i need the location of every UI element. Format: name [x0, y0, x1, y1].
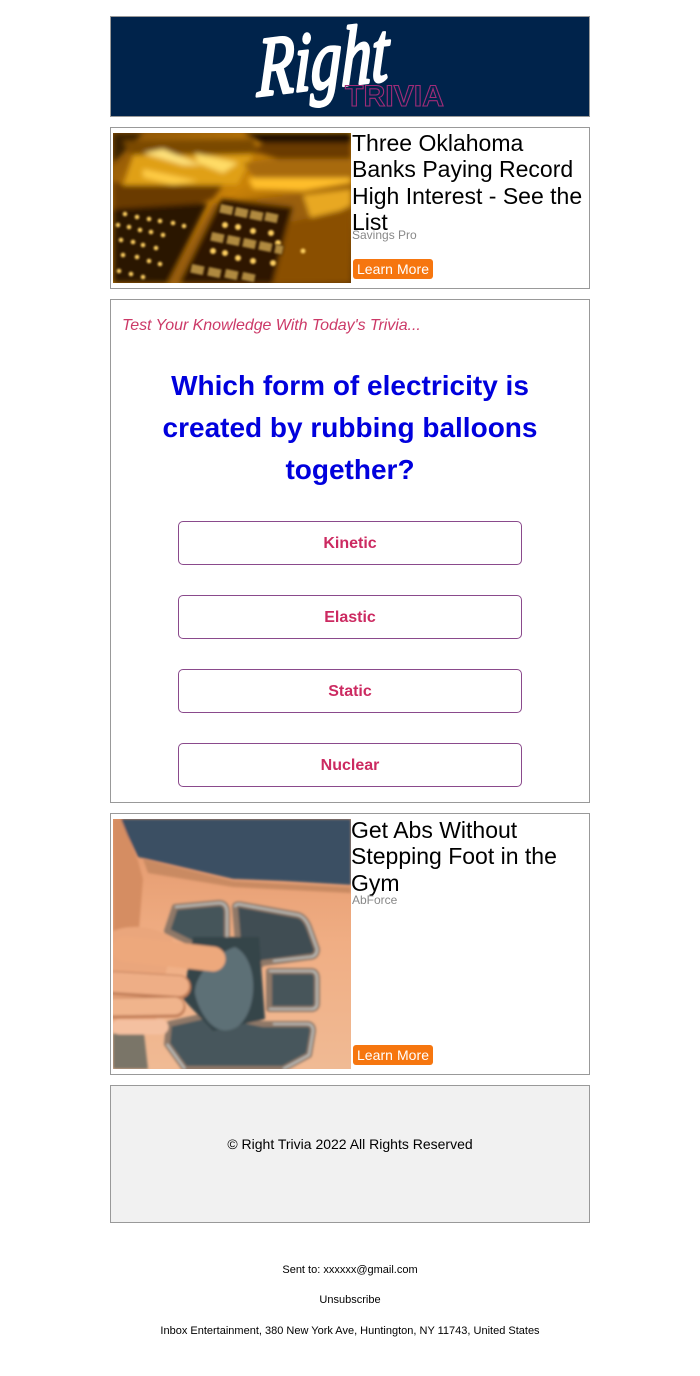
answer: Elastic: Elastic: [324, 609, 376, 626]
ad sponsor: AbForce: [352, 893, 397, 907]
ad headline: [352, 130, 582, 235]
ad photo: abdominal stimulator pad: [113, 819, 351, 1069]
ad headline: List: [352, 209, 388, 235]
panel: abs ad: [110, 813, 590, 1075]
copyright text: © Right Trivia 2022 All Rights Reserved: [227, 1136, 473, 1152]
panel: copyright: [110, 1085, 590, 1223]
answer: Static: Static: [328, 683, 372, 700]
footer: unsubscribe: Unsubscribe: [319, 1294, 381, 1306]
answer: Static: [178, 669, 522, 713]
question heading: Which form of electricity is: [171, 370, 529, 401]
question heading: created by rubbing balloons: [163, 412, 537, 443]
panel: trivia question: [110, 299, 590, 803]
answer: Kinetic: Kinetic: [323, 535, 377, 552]
ad headline: Gym: [351, 870, 400, 896]
ad headline: High Interest - See the: [352, 183, 582, 209]
footer: address: Inbox Entertainment, 380 New York Ave, Huntington, NY 11743, United States: [160, 1325, 540, 1337]
answer: Nuclear: [178, 743, 522, 787]
question heading: together?: [285, 454, 415, 485]
header banner with logo: [110, 16, 590, 117]
ad sponsor: Savings Pro: [352, 228, 417, 242]
ad photo: gold cash register: [113, 133, 351, 283]
answer: Kinetic: [178, 521, 522, 565]
question heading: [163, 370, 537, 485]
ad headline: Get Abs Without: [351, 817, 517, 843]
answer: Nuclear: Nuclear: [321, 757, 379, 774]
panel: savings ad: [110, 127, 590, 289]
logo: Right Trivia: TRIVIA: [345, 80, 444, 113]
ad headline: Three Oklahoma: [352, 130, 523, 156]
learn more button: Learn More: [357, 1047, 429, 1063]
footer: sent to: Sent to: xxxxxx@gmail.com: [282, 1264, 418, 1276]
ad headline: Banks Paying Record: [352, 156, 573, 182]
intro text: Test Your Knowledge With Today's Trivia...: [122, 317, 421, 334]
learn more button: Learn More: [357, 261, 429, 277]
ad headline: [351, 817, 557, 896]
ad headline: Stepping Foot in the: [351, 843, 557, 869]
answer: Elastic: [178, 595, 522, 639]
